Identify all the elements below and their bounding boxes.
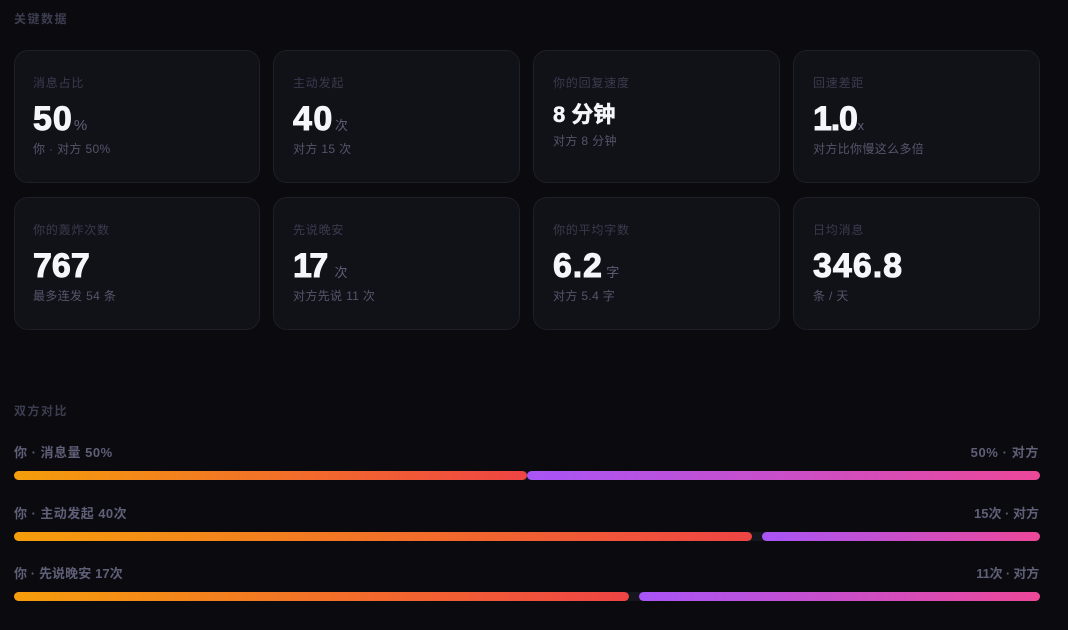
card: initiated: 主动发起 — [293, 76, 344, 90]
bar: initiated — [14, 532, 1040, 541]
bar: messages — [14, 471, 1040, 480]
heading: key data: 关键数据 — [14, 12, 68, 26]
card: daily messages: 346.8 — [813, 247, 903, 285]
card: first goodnight: 对方先说 11 次 — [293, 289, 375, 303]
card: burst count: 最多连发 54 条 — [33, 289, 116, 303]
label: other messages: 50% · 对方 — [971, 445, 1039, 460]
card: message share — [14, 50, 260, 183]
card: average characters: 你的平均字数 — [553, 223, 630, 237]
label: you goodnight: 你 · 先说晚安 17次 — [14, 566, 123, 581]
heading: comparison: 双方对比 — [14, 404, 68, 418]
card: reply gap: 回速差距 — [813, 76, 864, 90]
card: initiated: 对方 15 次 — [293, 142, 351, 156]
card: message share: 消息占比 — [33, 76, 84, 90]
card: average characters: 对方 5.4 字 — [553, 289, 615, 303]
card: message share: 你 · 对方 50% — [33, 142, 111, 156]
card: reply speed: 对方 8 分钟 — [553, 134, 617, 148]
card: daily messages: 日均消息 — [813, 223, 864, 237]
card: reply speed — [533, 50, 780, 183]
card: message share: 50% — [33, 100, 87, 138]
card: initiated — [273, 50, 520, 183]
card: burst count: 767 — [33, 247, 90, 285]
card: burst count: 你的轰炸次数 — [33, 223, 110, 237]
label: you initiated: 你 · 主动发起 40次 — [14, 506, 127, 521]
comparison row: initiated — [14, 506, 1040, 541]
card: first goodnight: 先说晚安 — [293, 223, 344, 237]
card: first goodnight: 17 次 — [293, 247, 347, 285]
label: other initiated: 15次 · 对方 — [974, 506, 1039, 521]
card: average characters: 6.2 字 — [553, 247, 619, 285]
card: reply gap: 1.0x — [813, 100, 864, 138]
card: reply gap — [793, 50, 1040, 183]
card: daily messages — [793, 197, 1040, 330]
card: burst count — [14, 197, 260, 330]
label: other goodnight: 11次 · 对方 — [976, 566, 1039, 581]
comparison row: messages — [14, 445, 1040, 480]
comparison row: goodnight — [14, 566, 1040, 601]
card: average characters — [533, 197, 780, 330]
card: reply speed: 你的回复速度 — [553, 76, 630, 90]
bar: goodnight — [14, 592, 1040, 601]
card: reply gap: 对方比你慢这么多倍 — [813, 142, 924, 156]
card: initiated: 40次 — [293, 100, 348, 138]
label: you messages: 你 · 消息量 50% — [14, 445, 113, 460]
card: daily messages: 条 / 天 — [813, 289, 849, 303]
card: first goodnight — [273, 197, 520, 330]
card: reply speed: 8 分钟 — [553, 102, 615, 127]
